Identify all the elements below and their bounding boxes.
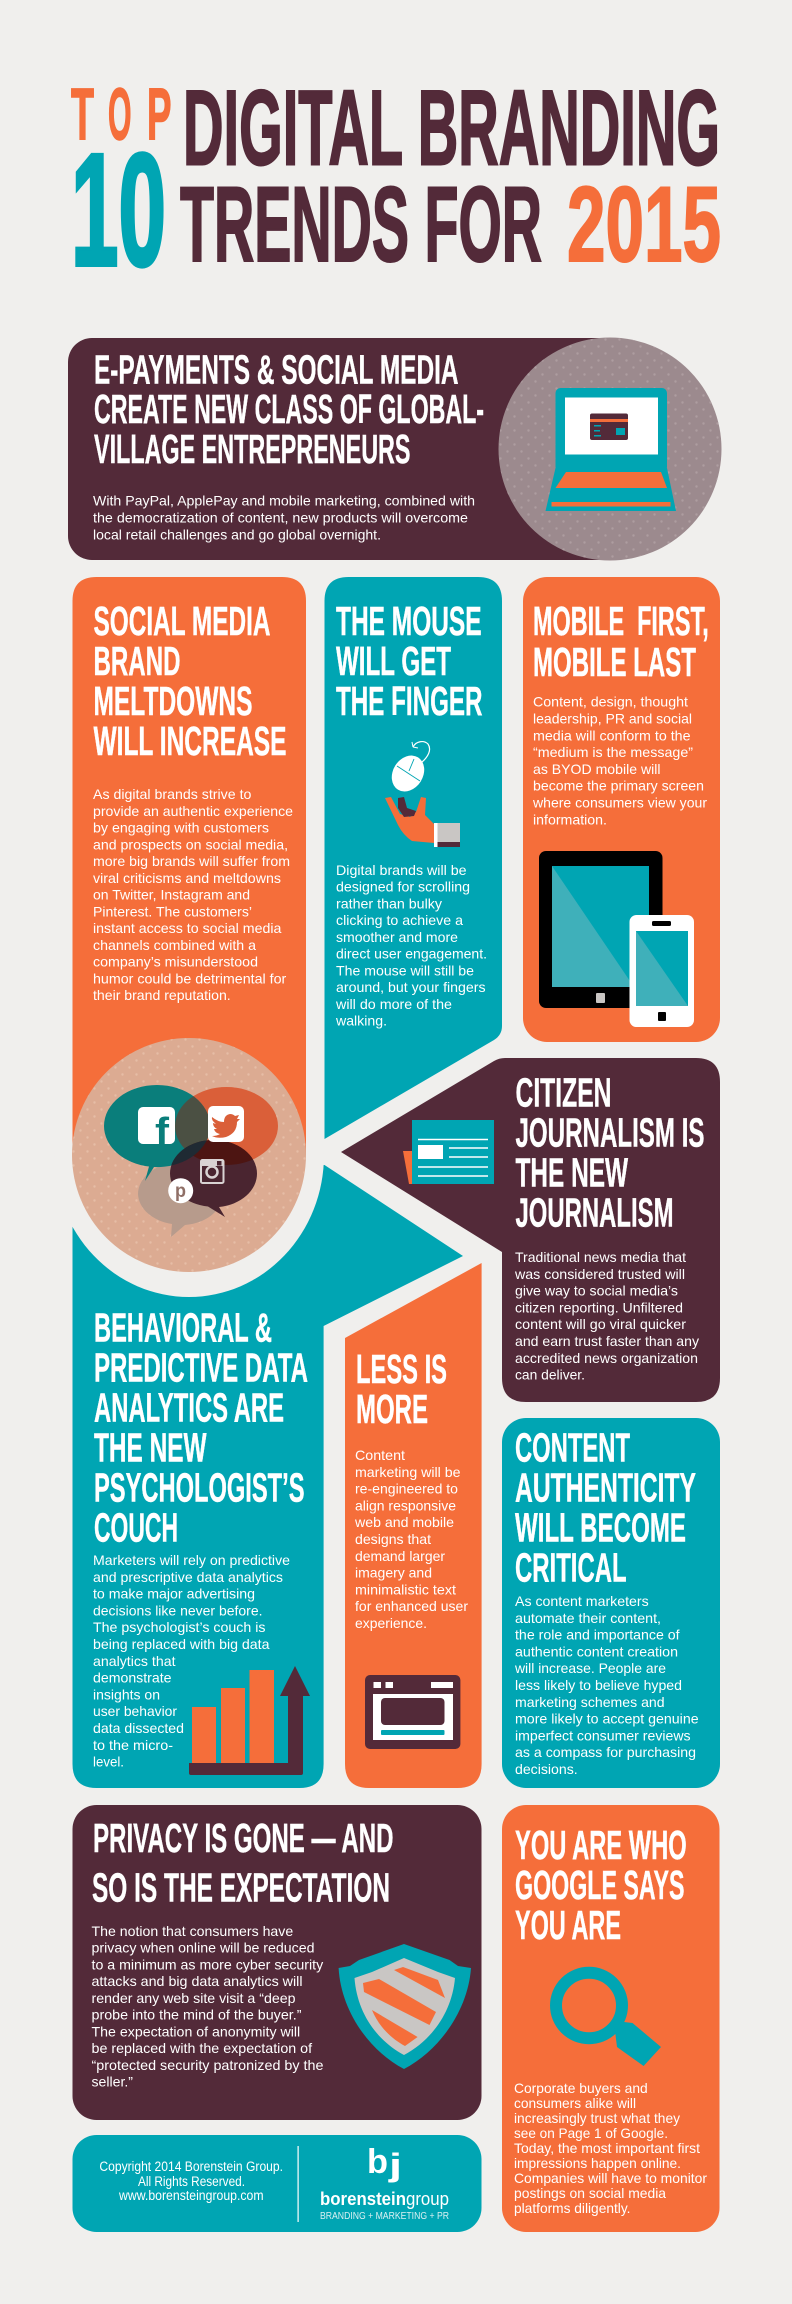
text: mobile first: become the primary screen	[533, 778, 704, 794]
text: google	[514, 2080, 707, 2216]
icon: newspaper	[403, 1120, 494, 1184]
text: behavioral: to the micro-	[93, 1737, 173, 1753]
panel: behavioral data analytics	[54, 1013, 463, 1788]
panel: privacy	[72, 1805, 482, 2120]
text: behavioral	[93, 1552, 290, 1770]
panel: less is more	[345, 1263, 482, 1788]
text: less is more: for enhanced user	[355, 1598, 468, 1614]
heading: content authenticity: CRITICAL	[515, 1545, 627, 1591]
text: mobile first	[532, 694, 707, 827]
text: privacy: attacks and big data analytics will	[92, 1973, 302, 1989]
text: the mouse: clicking to achieve a	[336, 912, 463, 928]
logo: borenstein group: borensteingroup	[320, 2189, 449, 2209]
heading: social media: SOCIAL MEDIA	[94, 598, 270, 644]
text: social media: channels combined with a	[93, 937, 256, 953]
heading: citizen: JOURNALISM	[516, 1190, 674, 1236]
bubble: beige	[138, 1162, 223, 1237]
text: less is more: designs that	[355, 1531, 431, 1547]
icon: pinterest	[168, 1178, 193, 1203]
icon: instagram	[201, 1160, 224, 1183]
text: behavioral: Marketers will rely on predictive	[93, 1552, 290, 1568]
text: citizen: and earn trust faster than any	[515, 1333, 699, 1349]
bubble: maroon	[170, 1140, 257, 1217]
chart: rising bars	[189, 1666, 310, 1775]
heading: google: YOU ARE	[515, 1902, 621, 1948]
heading: e-payments: VILLAGE ENTREPRENEURS	[94, 426, 410, 472]
heading: privacy	[92, 1815, 394, 1911]
heading: e-payments: CREATE NEW CLASS OF GLOBAL-	[94, 386, 484, 432]
text: social media: on Twitter, Instagram and	[93, 886, 250, 902]
text: e-payments: the democratization of content, new products will overcome	[93, 510, 468, 526]
text: behavioral: level.	[93, 1754, 124, 1770]
text: content authenticity: the role and importance of	[515, 1627, 680, 1643]
text: citizen: citizen reporting. Unfiltered	[515, 1299, 683, 1315]
heading: behavioral: PSYCHOLOGIST’S	[94, 1465, 304, 1511]
text: the mouse: direct user engagement.	[336, 946, 487, 962]
text: e-payments: local retail challenges and go global overnight.	[93, 526, 381, 542]
text: behavioral: to make major advertising	[93, 1586, 255, 1602]
text: behavioral: analytics that	[93, 1653, 176, 1669]
text: google: postings on social media	[514, 2185, 666, 2201]
text: social media: company’s misunderstood	[93, 954, 258, 970]
text: social media: their brand reputation.	[93, 987, 231, 1003]
text: behavioral: data dissected	[93, 1720, 184, 1736]
text: copyright: All Rights Reserved.	[138, 2174, 245, 2189]
text: content authenticity: As content marketers	[515, 1593, 649, 1609]
heading: social media: BRAND	[94, 638, 180, 684]
text: social media	[93, 786, 293, 1003]
text: the mouse: rather than bulky	[336, 895, 442, 911]
logo: borenstein group: BRANDING + MARKETING + PR	[320, 2210, 449, 2222]
top label: P	[147, 74, 172, 156]
text: privacy: render any web site visit a “deep	[92, 1990, 296, 2006]
number 10: 10	[71, 120, 166, 299]
text: the mouse: will do more of the	[335, 996, 452, 1012]
text: citizen	[514, 1249, 699, 1383]
text: citizen: content will go viral quicker	[515, 1316, 686, 1332]
text: e-payments: With PayPal, ApplePay and mobile marketing, combined with	[93, 492, 475, 508]
text: social media: instant access to social media	[93, 920, 282, 936]
icon: laptop	[546, 388, 676, 511]
heading: google	[515, 1822, 687, 1948]
heading: citizen: THE NEW	[516, 1150, 628, 1196]
text: the mouse: designed for scrolling	[336, 879, 470, 895]
text: content authenticity: imperfect consumer reviews	[515, 1727, 691, 1743]
text: content authenticity: authentic content creation	[515, 1643, 678, 1659]
text: the mouse: The mouse will still be	[336, 962, 474, 978]
text: social media: humor could be detrimental for	[93, 970, 287, 986]
icon: twitter	[208, 1106, 244, 1142]
text: mobile first: Content, design, thought	[533, 694, 688, 710]
heading: behavioral: PREDICTIVE DATA	[94, 1345, 308, 1391]
text: the mouse	[335, 862, 487, 1029]
text: less is more: demand larger	[355, 1548, 445, 1564]
text: citizen: can deliver.	[515, 1367, 585, 1383]
heading: the mouse: WILL GET	[336, 638, 451, 684]
text: citizen: was considered trusted will	[514, 1266, 685, 1282]
text: content authenticity: marketing schemes and	[515, 1694, 665, 1710]
text: google: impressions happen online.	[514, 2155, 681, 2171]
panel: mobile first	[523, 577, 720, 1042]
icon: social speech bubbles	[72, 1038, 306, 1272]
text: privacy: to a minimum as more cyber security	[92, 1956, 323, 1972]
heading: less is more	[356, 1346, 447, 1432]
text: google: increasingly trust what they	[514, 2110, 680, 2126]
logo: borenstein group: b	[367, 2143, 388, 2181]
text: google: Today, the most important first	[514, 2140, 700, 2156]
text: privacy: “protected security patronized by the	[92, 2057, 324, 2073]
text: google: Companies will have to monitor	[514, 2170, 707, 2186]
text: less is more	[354, 1447, 468, 1631]
text: less is more: imagery and	[355, 1565, 432, 1581]
text: content authenticity: more likely to accept genuine	[515, 1711, 699, 1727]
text: the mouse: smoother and more	[336, 929, 458, 945]
text: content authenticity: less likely to believe hyped	[515, 1677, 682, 1693]
heading: less is more: LESS IS	[356, 1346, 447, 1392]
text: behavioral: The psychologist’s couch is	[93, 1619, 266, 1635]
text: citizen: give way to social media’s	[515, 1283, 678, 1299]
panel: content authenticity	[502, 1418, 720, 1788]
panel: e-payments	[68, 338, 722, 560]
heading: behavioral: BEHAVIORAL &	[94, 1305, 272, 1351]
text: copyright	[99, 2159, 283, 2203]
icon: shield	[339, 1944, 471, 2069]
text: content authenticity: will increase. People are	[514, 1660, 666, 1676]
heading: content authenticity	[515, 1425, 696, 1591]
text: privacy: be replaced with the expectation of	[92, 2040, 312, 2056]
text: google: see on Page 1 of Google.	[514, 2125, 668, 2141]
text: social media: viral criticisms and meltdowns	[93, 870, 281, 886]
text: content authenticity: as a compass for purchasing	[515, 1744, 696, 1760]
heading: social media	[94, 598, 286, 764]
text: citizen: accredited news organization	[515, 1350, 698, 1366]
top label: O	[108, 74, 132, 156]
heading: privacy: PRIVACY IS GONE — AND	[93, 1815, 394, 1861]
infographic	[68, 87, 722, 2232]
text: privacy: probe into the mind of the buyer.”	[92, 2006, 302, 2022]
icon: phone	[630, 915, 694, 1027]
text: social media: and prospects on social media,	[93, 836, 288, 852]
heading: e-payments	[94, 346, 484, 472]
text: behavioral: demonstrate	[93, 1670, 172, 1686]
heading: the mouse: THE MOUSE	[336, 598, 482, 644]
heading: mobile first	[533, 598, 709, 685]
heading: citizen: CITIZEN	[516, 1070, 612, 1116]
icon: magnifying glass	[556, 1973, 661, 2066]
text: less is more: re-engineered to	[355, 1481, 458, 1497]
text: mobile first: as BYOD mobile will	[533, 761, 660, 777]
heading: e-payments: E-PAYMENTS & SOCIAL MEDIA	[94, 346, 458, 392]
heading: the mouse: THE FINGER	[336, 678, 482, 724]
icon: browser window	[365, 1675, 460, 1749]
heading: content authenticity: CONTENT	[515, 1425, 630, 1471]
heading: the mouse	[336, 598, 482, 724]
text: content authenticity: automate their content,	[515, 1610, 661, 1626]
panel: citizen journalism	[341, 1058, 720, 1402]
text: behavioral: decisions like never before.	[93, 1602, 262, 1618]
text: less is more: web and mobile	[354, 1514, 454, 1530]
heading: citizen	[516, 1070, 704, 1236]
heading: social media: WILL INCREASE	[94, 718, 286, 764]
text: the mouse: Digital brands will be	[336, 862, 467, 878]
text: social media: Pinterest. The customers’	[93, 903, 252, 919]
heading: behavioral	[94, 1305, 308, 1551]
top label: T	[71, 74, 94, 156]
text: citizen: Traditional news media that	[515, 1249, 686, 1265]
title	[71, 68, 721, 299]
icon: tablet	[539, 851, 662, 1008]
text: the mouse: around, but your fingers	[336, 979, 486, 995]
text: content authenticity: decisions.	[515, 1761, 578, 1777]
text: mobile first: information.	[533, 811, 607, 827]
panel: footer	[72, 2135, 482, 2232]
heading: social media: MELTDOWNS	[94, 678, 252, 724]
heading: behavioral: ANALYTICS ARE	[94, 1385, 284, 1431]
text: google: consumers alike will	[514, 2095, 636, 2111]
heading: privacy: SO IS THE EXPECTATION	[92, 1865, 390, 1911]
text: less is more: minimalistic text	[355, 1581, 456, 1597]
panel: the mouse	[324, 577, 502, 1139]
icon: pinterest: p	[175, 1181, 186, 1202]
text: behavioral: and prescriptive data analytics	[93, 1569, 283, 1585]
text: privacy: seller.”	[92, 2074, 133, 2090]
text: mobile first: “medium is the message”	[533, 744, 693, 760]
heading: behavioral: THE NEW	[94, 1425, 207, 1471]
text: behavioral: being replaced with big data	[93, 1636, 270, 1652]
panel: google	[502, 1805, 720, 2232]
text: social media: more big brands will suffer from	[93, 853, 290, 869]
text: privacy	[92, 1923, 324, 2090]
text: mobile first: leadership, PR and social	[533, 710, 692, 726]
text: content authenticity	[514, 1593, 699, 1777]
text: behavioral: insights on	[93, 1686, 160, 1702]
text: google: Corporate buyers and	[514, 2080, 648, 2096]
text: social media: by engaging with customers	[93, 820, 269, 836]
icon: facebook: f	[155, 1111, 169, 1153]
text: privacy: privacy when online will be reduced	[92, 1940, 314, 1956]
panel: social media meltdowns	[72, 577, 306, 1272]
text: social media: provide an authentic experience	[93, 803, 293, 819]
text: google: platforms diligently.	[514, 2200, 630, 2216]
heading: behavioral: COUCH	[94, 1505, 178, 1551]
text: copyright: www.borensteingroup.com	[118, 2188, 264, 2203]
logo: borenstein group	[320, 2143, 449, 2222]
text: privacy: The notion that consumers have	[92, 1923, 293, 1939]
heading: less is more: MORE	[356, 1386, 428, 1432]
bubble: teal	[104, 1085, 210, 1181]
text: less is more: Content	[355, 1447, 405, 1463]
logo: borenstein group: j	[388, 2147, 402, 2183]
text: less is more: marketing will be	[355, 1464, 461, 1480]
text: e-payments	[93, 492, 475, 542]
icon: mouse and hand	[385, 742, 460, 847]
text: privacy: The expectation of anonymity will	[92, 2023, 300, 2039]
text: behavioral: user behavior	[93, 1703, 177, 1719]
text: mobile first: media will conform to the	[533, 727, 691, 743]
text: less is more: experience.	[355, 1615, 427, 1631]
text: copyright: Copyright 2014 Borenstein Group.	[99, 2159, 283, 2174]
icon: facebook	[138, 1107, 175, 1153]
bubble: red	[175, 1087, 278, 1183]
text: less is more: align responsive	[355, 1497, 456, 1513]
text: social media: As digital brands strive to	[93, 786, 252, 802]
text: the mouse: walking.	[335, 1013, 387, 1029]
text: mobile first: where consumers view your	[532, 794, 707, 810]
top label	[71, 74, 172, 156]
